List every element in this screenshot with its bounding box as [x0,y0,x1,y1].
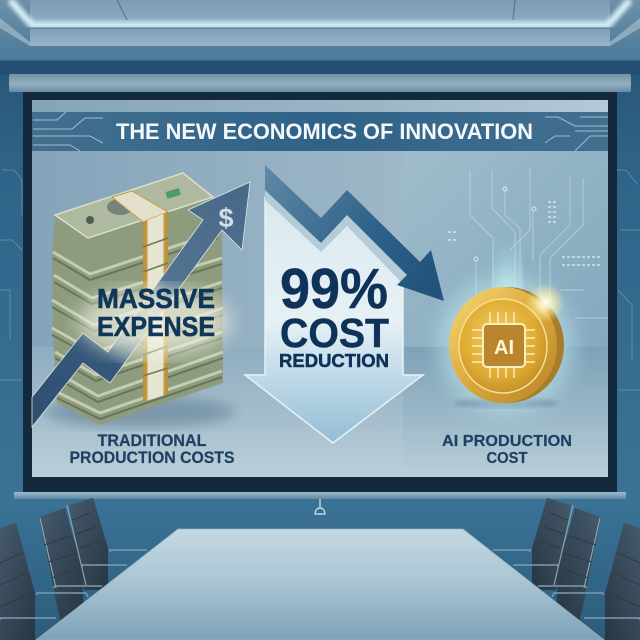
zigzag decline arrow [265,165,444,301]
chairs: right [493,498,640,640]
conference table [36,529,604,640]
dollar icon: $ [218,203,234,233]
label: traditional production costs [70,432,234,467]
label: massive expense: MASSIVE [97,283,215,314]
zigzag shadow band [265,190,407,282]
ceiling [0,0,640,61]
up arrow [32,182,250,427]
title banner [32,112,608,151]
down arrow [245,165,444,443]
label: traditional production costs: PRODUCTION COSTS [70,449,234,467]
title banner: THE NEW ECONOMICS OF INNOVATION [116,119,533,144]
paper strap [112,191,168,222]
top banknote [55,173,213,238]
projected slide [32,100,608,477]
panel: right circuit backdrop [403,151,608,347]
projector screen case [9,74,631,492]
label: 99% cost reduction [279,257,389,371]
label: AI production cost: COST [486,450,528,467]
pull handle [315,499,325,514]
label: massive expense: EXPENSE [97,311,215,342]
label: 99% cost reduction: 99% [280,257,388,321]
screen bottom bar [14,492,626,514]
label: AI production cost: AI PRODUCTION [442,433,572,450]
label: AI production cost [442,433,572,467]
chip icon: AI [494,337,514,359]
text glow [79,288,231,356]
label: 99% cost reduction: COST [280,310,389,356]
label: traditional production costs: TRADITIONAL [98,432,206,450]
money stack [45,173,235,428]
gold AI coin [438,277,574,413]
chairs: left [0,498,147,640]
panel: floor [32,347,608,477]
label: 99% cost reduction: REDUCTION [279,351,389,371]
label: massive expense [97,283,215,342]
